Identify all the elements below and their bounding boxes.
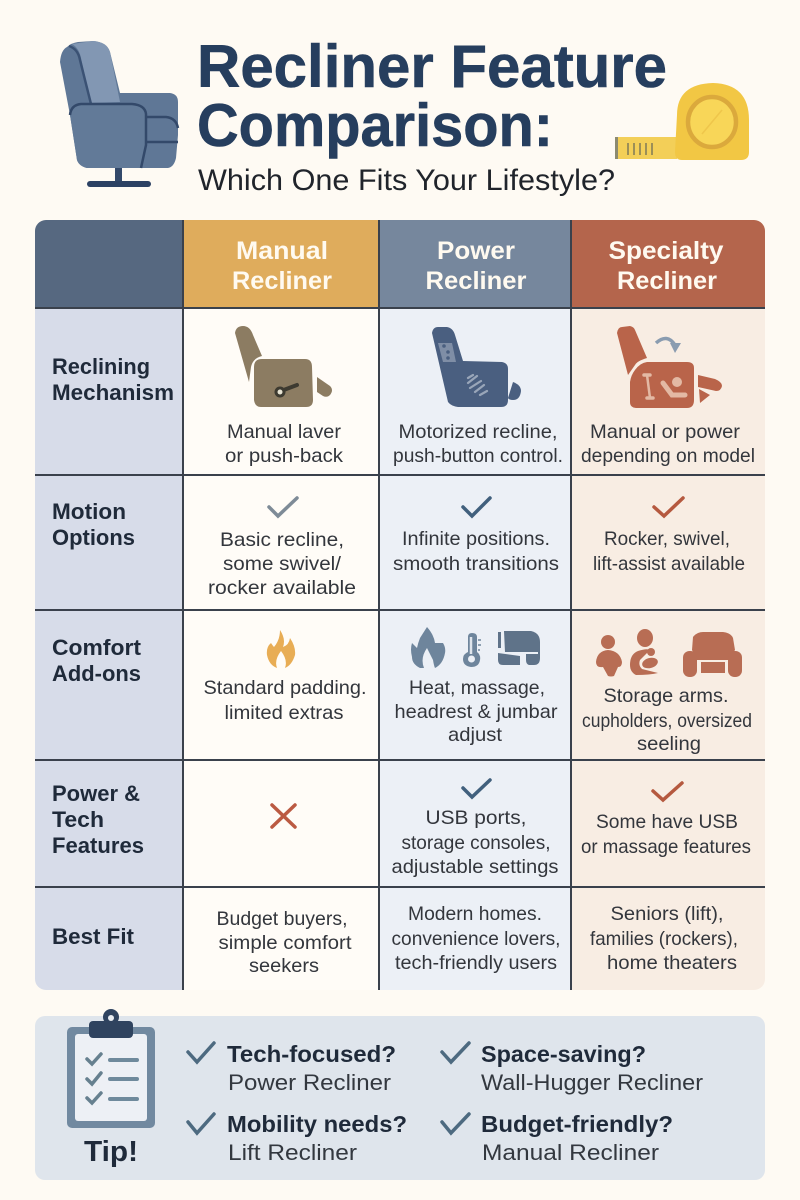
column header: manual bbox=[232, 237, 332, 295]
text: specialty tech: or massage features bbox=[581, 836, 751, 858]
text: manual comfort: limited extras bbox=[224, 702, 344, 724]
row label: power and tech features: Power & bbox=[52, 781, 140, 806]
tip: budget-friendly bbox=[442, 1111, 673, 1165]
row label: comfort add-ons: Comfort bbox=[52, 635, 142, 660]
text: power best fit: Modern homes. bbox=[408, 903, 542, 925]
row label: power and tech features: Features bbox=[52, 833, 144, 858]
text: power best fit: convenience lovers, bbox=[392, 928, 560, 950]
text: power tech: storage consoles, bbox=[402, 832, 550, 854]
text: power mechanism bbox=[393, 421, 563, 467]
icon: specialty recliner bbox=[617, 326, 722, 408]
icon: check grey bbox=[269, 498, 297, 516]
text: manual best fit bbox=[216, 908, 352, 977]
text: specialty motion: lift-assist available bbox=[593, 553, 745, 575]
column header: power: Recliner bbox=[426, 267, 527, 295]
text: power tech: adjustable settings bbox=[392, 856, 559, 878]
title: Recliner Feature bbox=[197, 33, 667, 100]
text: power best fit: tech-friendly users bbox=[395, 952, 557, 974]
row label: reclining mechanism bbox=[52, 354, 174, 405]
row label: motion options bbox=[52, 499, 135, 550]
text: specialty mechanism: depending on model bbox=[581, 445, 755, 467]
text: specialty motion: Rocker, swivel, bbox=[604, 528, 730, 550]
tip: mobility needs: Mobility needs? bbox=[227, 1111, 407, 1137]
row label: comfort add-ons: Add-ons bbox=[52, 661, 141, 686]
text: specialty comfort: Storage arms. bbox=[604, 685, 728, 707]
icon: recliner chair bbox=[60, 41, 178, 187]
tip: budget-friendly: Budget-friendly? bbox=[481, 1111, 673, 1137]
column header: manual: Manual bbox=[236, 237, 328, 265]
text: manual comfort: Standard padding. bbox=[204, 677, 366, 699]
icon: manual recliner with lever bbox=[235, 326, 332, 407]
row label: power and tech features bbox=[52, 781, 144, 858]
tip: space-saving: Space-saving? bbox=[481, 1041, 646, 1067]
text: power motion bbox=[393, 528, 559, 575]
text: specialty best fit: families (rockers), bbox=[590, 928, 738, 950]
tip: space-saving bbox=[442, 1041, 703, 1095]
row label: motion options: Motion bbox=[52, 499, 126, 524]
icon: cross bbox=[272, 805, 295, 827]
text: power tech bbox=[392, 807, 559, 878]
column header: power: Power bbox=[437, 237, 515, 265]
tip: tech-focused: Tech-focused? bbox=[227, 1041, 396, 1067]
text: power mechanism: Motorized recline, bbox=[398, 421, 558, 443]
column header: manual: Recliner bbox=[232, 267, 332, 295]
icon: tape measure bbox=[615, 83, 749, 160]
icon: check blue bbox=[463, 498, 490, 516]
text: power motion: Infinite positions. bbox=[402, 528, 550, 550]
text: specialty best fit: Seniors (lift), bbox=[610, 903, 724, 925]
tip label: Tip! bbox=[84, 1136, 138, 1168]
tip: mobility needs: Lift Recliner bbox=[228, 1140, 357, 1165]
text: specialty comfort bbox=[582, 685, 752, 755]
text: power comfort bbox=[394, 677, 558, 746]
text: manual motion: Basic recline, bbox=[220, 529, 344, 551]
panel: tip bbox=[35, 1009, 765, 1180]
tip: mobility needs bbox=[188, 1111, 407, 1165]
icon: clipboard bbox=[67, 1009, 155, 1128]
panel: comparison table bbox=[35, 220, 765, 991]
text: specialty comfort: seeling bbox=[637, 733, 701, 755]
text: power motion: smooth transitions bbox=[393, 553, 559, 575]
text: power comfort: Heat, massage, bbox=[409, 677, 545, 699]
row label: reclining mechanism: Mechanism bbox=[52, 380, 174, 405]
row label: comfort add-ons bbox=[52, 635, 142, 686]
icon: check rust bbox=[654, 498, 683, 516]
row label: power and tech features: Tech bbox=[52, 807, 104, 832]
text: specialty best fit: home theaters bbox=[607, 952, 737, 974]
text: specialty tech: Some have USB bbox=[596, 811, 738, 833]
title: Comparison: bbox=[197, 92, 553, 159]
text: manual motion bbox=[208, 529, 356, 599]
text: manual best fit: simple comfort bbox=[218, 932, 352, 954]
tip: space-saving: Wall-Hugger Recliner bbox=[481, 1070, 703, 1095]
text: power comfort: headrest & jumbar bbox=[394, 701, 558, 723]
icon: flame bbox=[267, 630, 295, 668]
tip: tech-focused: Power Recliner bbox=[228, 1070, 391, 1095]
text: manual mechanism: or push-back bbox=[225, 445, 343, 467]
text: specialty tech bbox=[581, 811, 751, 858]
column header: specialty bbox=[608, 237, 724, 295]
row label: best fit: Best Fit bbox=[52, 924, 135, 949]
text: specialty mechanism: Manual or power bbox=[590, 421, 741, 443]
text: power mechanism: push-button control. bbox=[393, 445, 563, 467]
text: specialty mechanism bbox=[581, 421, 755, 467]
text: manual mechanism: Manual laver bbox=[227, 421, 342, 443]
text: manual motion: some swivel/ bbox=[223, 553, 342, 575]
text: manual best fit: Budget buyers, bbox=[216, 908, 348, 930]
column header: power bbox=[426, 237, 527, 295]
text: manual mechanism bbox=[225, 421, 343, 467]
row label: motion options: Options bbox=[52, 525, 135, 550]
icons: people and sofa bbox=[596, 629, 742, 677]
icon: check blue bbox=[463, 780, 490, 797]
subtitle: Which One Fits Your Lifestyle? bbox=[198, 164, 615, 197]
text: power tech: USB ports, bbox=[426, 807, 526, 829]
text: specialty comfort: cupholders, oversized bbox=[582, 710, 752, 732]
text: specialty best fit bbox=[590, 903, 738, 974]
text: manual comfort bbox=[204, 677, 366, 724]
icons: heat, thermometer, lumbar bbox=[411, 627, 540, 668]
icon: check rust bbox=[653, 783, 682, 800]
text: power comfort: adjust bbox=[448, 724, 503, 746]
text: manual best fit: seekers bbox=[249, 955, 319, 977]
text: specialty motion bbox=[593, 528, 745, 575]
row label: reclining mechanism: Reclining bbox=[52, 354, 150, 379]
column header: specialty: Recliner bbox=[617, 267, 717, 295]
title bbox=[197, 33, 667, 159]
icon: power recliner with remote bbox=[432, 327, 521, 407]
tip: budget-friendly: Manual Recliner bbox=[482, 1140, 659, 1165]
text: power best fit bbox=[392, 903, 560, 974]
column header: specialty: Specialty bbox=[608, 237, 724, 265]
text: manual motion: rocker available bbox=[208, 577, 356, 599]
tip: tech-focused bbox=[188, 1041, 396, 1095]
